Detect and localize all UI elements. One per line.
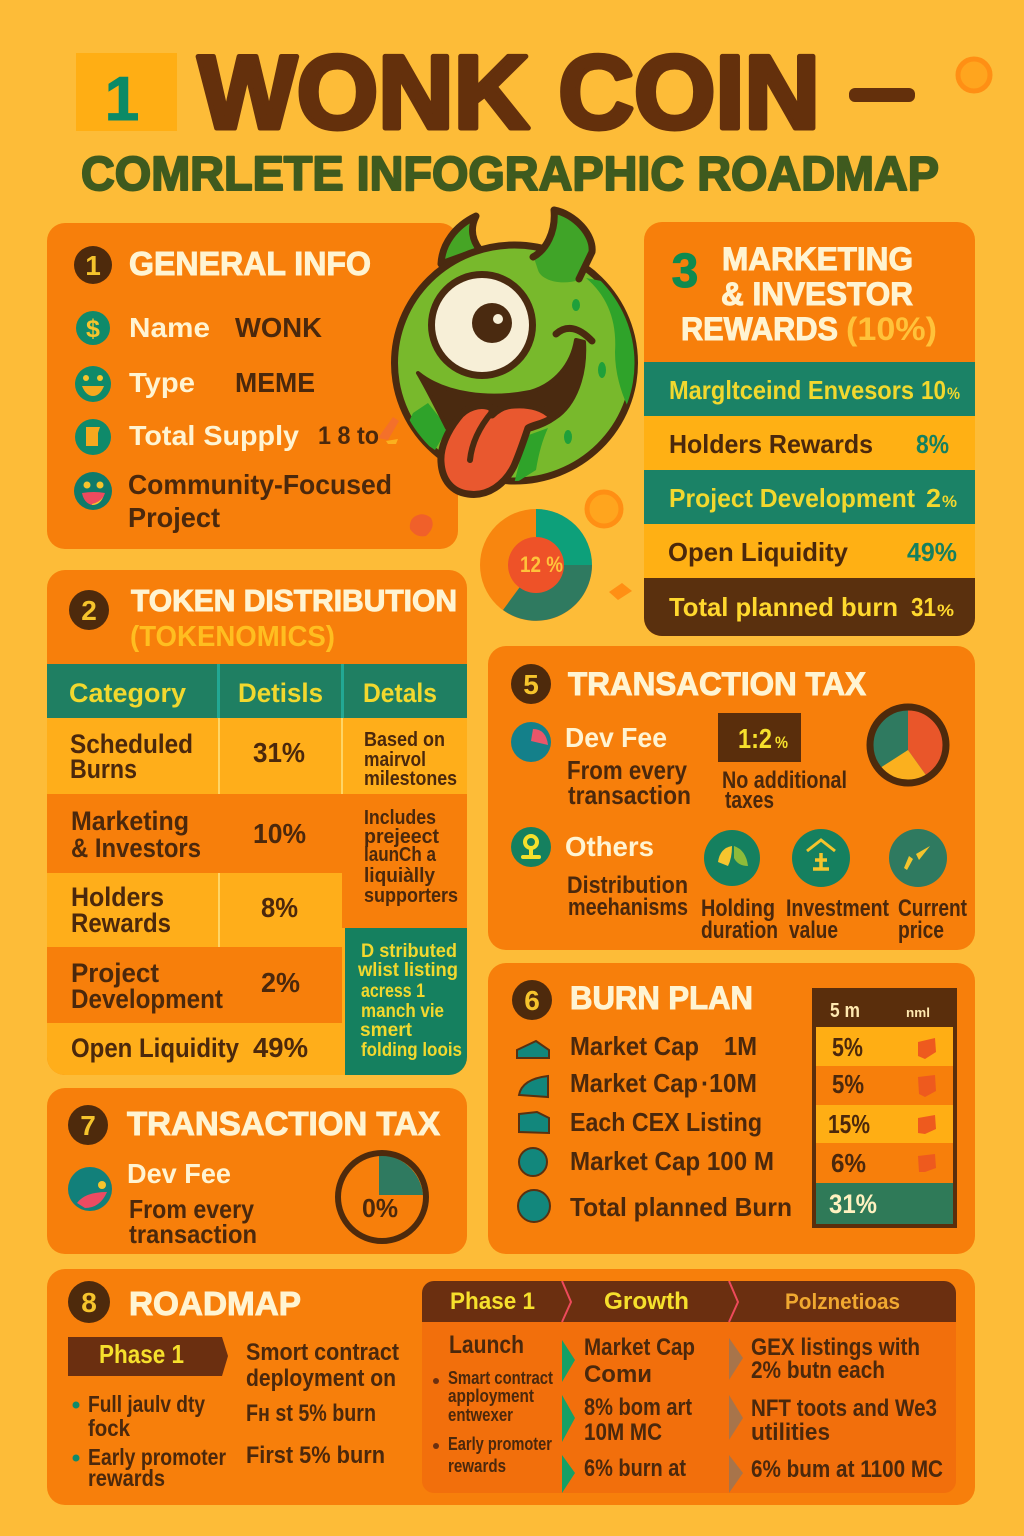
phase 1 bullets: Full jaulv dty [88, 1391, 205, 1417]
row: project development: Project [71, 958, 159, 988]
heading: token distribution: TOKEN DISTRIBUTION [131, 583, 457, 618]
table header [70, 682, 436, 708]
green note: distribution [357, 941, 462, 1061]
row: scheduled burns: mairvol [364, 749, 426, 771]
others text [565, 831, 688, 921]
row: name: WONK [235, 312, 322, 343]
dev fee text [565, 722, 691, 810]
row 5%: 5% [832, 1069, 864, 1099]
title block [76, 35, 990, 201]
milestone: market cap 100M: Market Cap 100 M [570, 1146, 774, 1176]
title dash [849, 88, 915, 102]
dev fee text: From every [129, 1194, 254, 1224]
number 3: 3 [672, 245, 698, 298]
row: type [75, 366, 315, 402]
row: scheduled burns [70, 731, 456, 785]
dev fee text: transaction [568, 780, 691, 810]
decorative blob [410, 514, 433, 536]
current price [889, 829, 967, 944]
tax value box: % [775, 733, 788, 752]
green note: distribution: acress 1 [361, 981, 425, 1002]
pie chart: 0% [338, 1153, 426, 1241]
dev fee text: From every [567, 755, 687, 785]
heading: marketing and investor rewards: & INVESTOR [721, 276, 913, 312]
roadmap timeline [422, 1281, 956, 1493]
number badge 2: 2 [81, 595, 97, 626]
green note: distribution: folding loois [361, 1040, 462, 1061]
milestone: market cap 1M: Market Cap [570, 1031, 699, 1061]
row: marketing and investors: 10% [253, 818, 306, 849]
row: scheduled burns: Scheduled [70, 729, 193, 759]
no additional taxes note: taxes [725, 787, 774, 814]
others text: Distribution [567, 872, 688, 899]
number badge 8 [68, 1281, 110, 1323]
pie chart: tax split [870, 707, 947, 783]
row 15% [816, 1105, 953, 1143]
row: project development: 2% [261, 967, 300, 998]
panel 3: marketing and investor rewards [644, 222, 975, 636]
milestone: market cap 1M [517, 1031, 757, 1061]
row: holders rewards: Rewards [71, 908, 171, 938]
row 5%: 5% [832, 1032, 863, 1062]
row: holders rewards [72, 886, 298, 932]
green note: distribution: wlist listing [357, 960, 458, 981]
row: open liquidity 49%: Open Liquidity [668, 537, 849, 567]
burn milestones list [517, 1031, 792, 1222]
badge: number 1 [76, 53, 177, 134]
phase 1 details: Smort contract [246, 1339, 399, 1366]
phase 1 bullets [72, 1391, 226, 1491]
row: scheduled burns: 31% [253, 737, 305, 768]
column: launch: Early promoter [448, 1434, 552, 1454]
table header: Detisls [238, 678, 323, 708]
dev fee text: transaction [129, 1219, 257, 1249]
dev fee text: Dev Fee [127, 1158, 231, 1189]
green note: distribution: smert [360, 1020, 413, 1041]
row: marketing and investors 10%: 10 [921, 375, 946, 405]
column: growth: Market Cap [584, 1334, 695, 1361]
panel 2: token distribution [47, 570, 467, 1075]
number badge 5: 5 [523, 669, 539, 700]
row: total planned burn 31%: Total planned burn [669, 592, 898, 622]
column: listings and utilities: 2% butn each [751, 1357, 885, 1384]
phase 1 banner: Phase 1 [99, 1339, 184, 1369]
row: total planned burn 31% [644, 578, 975, 636]
row: holders rewards: 8% [261, 892, 298, 923]
row: marketing and investors: Marketing [71, 806, 189, 836]
column: launch: Launch [449, 1331, 524, 1359]
number badge 2 [69, 590, 109, 630]
green note: distribution: manch vie [361, 1001, 444, 1022]
no additional taxes note: No additional [722, 767, 847, 794]
column: launch: Smart contract [448, 1368, 553, 1388]
row 5% [816, 1066, 953, 1105]
milestone: market cap 1M: 1M [724, 1031, 757, 1061]
column: listings and utilities: GEX listings with [751, 1334, 920, 1361]
row: marketing and investors 10% [644, 362, 975, 416]
row: open liquidity [72, 1038, 308, 1062]
column: launch: rewards [448, 1456, 506, 1476]
number badge 1: 1 [85, 250, 101, 281]
investment value: Investment [786, 895, 889, 922]
row: name: Name [129, 312, 210, 343]
small pie chart: 12% [480, 509, 592, 621]
row: type: MEME [235, 367, 315, 398]
phase 1 details: Fн st 5% burn [246, 1400, 376, 1427]
timeline headers: Growth [604, 1288, 689, 1315]
heading: transaction tax: TRANSACTION TAX [568, 666, 867, 702]
number badge 5 [511, 664, 551, 704]
dev fee text: Dev Fee [565, 722, 667, 753]
column arrows: green [562, 1340, 575, 1493]
eye [428, 271, 536, 379]
number badge 6 [512, 980, 552, 1020]
panel 7: transaction tax [47, 1088, 467, 1254]
phase 1 details: deployment on [246, 1365, 396, 1392]
mouth [418, 340, 584, 435]
row: marketing and investors: launCh a [364, 844, 437, 866]
heading: marketing and investor rewards: MARKETING [722, 241, 913, 277]
row: marketing and investors: liquiàlly [364, 865, 436, 887]
phase 1 details [246, 1339, 399, 1469]
row: open liquidity: 49% [253, 1032, 308, 1063]
row: scheduled burns: milestones [364, 768, 457, 790]
column arrows: brown [729, 1338, 743, 1493]
milestone: market cap 10M: ·10M [701, 1068, 757, 1098]
tokenomics table [47, 664, 467, 1075]
phase 1 details: First 5% burn [246, 1442, 385, 1469]
column: launch: entwexer [448, 1405, 513, 1425]
right horn [534, 210, 592, 282]
column: listings and utilities: utilities [751, 1419, 830, 1446]
number badge 1 [74, 246, 112, 284]
dev fee icon [68, 1167, 112, 1211]
heading: burn plan: BURN PLAN [570, 980, 753, 1016]
decorative coin [587, 492, 621, 526]
dev fee text [127, 1158, 257, 1249]
row: type: Type [129, 367, 195, 398]
phase 1 bullets: rewards [88, 1465, 165, 1491]
badge: number 1: 1 [105, 65, 139, 134]
column: listings and utilities: 6% bum at 1100 MC [751, 1456, 943, 1483]
row: project development 2%: % [942, 492, 957, 511]
body [394, 245, 634, 481]
title: WONK COIN: WONK COIN [198, 35, 820, 151]
body shading [405, 278, 645, 484]
row: name: $ [86, 315, 100, 343]
row: total planned burn 31%: 31 [911, 592, 936, 622]
row: marketing and investors: Includes [364, 807, 436, 829]
others text: Others [565, 831, 654, 862]
column: growth: 6% burn at [584, 1455, 686, 1482]
heading: marketing and investor rewards [681, 241, 937, 347]
heading: token distribution [130, 583, 457, 653]
subtitle: COMRLETE INFOGRAPHIC ROADMAP [81, 148, 939, 201]
heading: transaction tax: TRANSACTION TAX [127, 1105, 440, 1142]
row: total planned burn 31%: % [937, 601, 954, 620]
row 5% [816, 1027, 953, 1066]
table header: Detals [363, 678, 437, 708]
dev fee icon [511, 722, 551, 762]
row: community-focused project: Community-Focused [128, 469, 392, 500]
pie chart: 0%: 0% [362, 1193, 398, 1223]
row: total supply: Total Supply [129, 420, 299, 451]
holding duration: Holding [701, 895, 775, 922]
small pie chart: 12%: 12 % [520, 552, 563, 577]
row: marketing and investors: & Investors [71, 833, 201, 863]
row: open liquidity 49%: 49% [907, 537, 957, 567]
row: project development: Development [71, 984, 223, 1014]
row: marketing and investors 10%: Margltceind Envesors [669, 375, 914, 405]
row: marketing and investors 10%: % [947, 384, 960, 403]
burn percentage table: nml [906, 1005, 930, 1020]
milestone: market cap 10M: Market Cap [570, 1068, 698, 1098]
row: marketing and investors: prejeect [364, 826, 439, 848]
left horn [441, 216, 480, 264]
column: growth: 10M MC [584, 1419, 662, 1446]
phase 1 banner [68, 1337, 228, 1376]
decorative diamond [609, 583, 632, 600]
row: holders rewards 8%: Holders Rewards [669, 429, 873, 459]
row 15%: 15% [828, 1109, 870, 1139]
row: project development [71, 958, 300, 1014]
cheek line [556, 328, 592, 341]
others text: meehanisms [568, 894, 688, 921]
investment value [786, 829, 889, 944]
holding duration: duration [701, 917, 778, 944]
column: listings and utilities [751, 1334, 943, 1483]
holding duration [701, 830, 778, 944]
tax value box: 1:2 [738, 723, 772, 754]
row: name [76, 311, 322, 345]
timeline headers: Polznetioas [785, 1289, 900, 1314]
number badge 6: 6 [524, 985, 540, 1016]
burn percentage table: 5 m [830, 1000, 860, 1022]
row: holders rewards: Holders [71, 882, 164, 912]
decorative coin [958, 59, 990, 91]
row total 31%: 31% [829, 1189, 877, 1219]
heading: marketing and investor rewards: REWARDS [681, 311, 838, 347]
row: open liquidity 49% [644, 524, 975, 578]
number badge 7 [68, 1105, 108, 1145]
column: growth [584, 1334, 695, 1482]
decorative splash [378, 417, 399, 444]
column: growth: 8% bom art [584, 1394, 692, 1421]
heading: token distribution: (TOKENOMICS) [130, 621, 335, 653]
row: community-focused project: Project [128, 502, 220, 533]
column: listings and utilities: NFT toots and We3 [751, 1395, 937, 1422]
no additional taxes note [722, 767, 847, 814]
panel 6: burn plan [488, 963, 975, 1254]
row: total supply [75, 419, 379, 455]
column: growth: Comи [584, 1361, 652, 1388]
row: project development 2%: Project Development [669, 483, 915, 513]
panel 1: general info [47, 223, 458, 549]
number badge 7: 7 [80, 1110, 96, 1141]
row: marketing and investors [71, 806, 458, 907]
tax value box [718, 713, 801, 762]
row: scheduled burns: Burns [70, 754, 137, 784]
tongue [441, 405, 552, 494]
investment value: value [789, 917, 838, 944]
panel 5: transaction tax [488, 646, 975, 950]
others icon [511, 827, 551, 867]
row: holders rewards 8% [644, 416, 975, 470]
row: total supply: 1 8 to [318, 422, 379, 450]
phase 1 bullets: Early promoter [88, 1444, 226, 1470]
green note: distribution: D stributed [361, 941, 457, 962]
table header: Category [69, 678, 186, 708]
heading: general info: GENERAL INFO [129, 245, 371, 282]
heading: roadmap: ROADMAP [129, 1285, 301, 1322]
row: open liquidity: Open Liquidity [71, 1033, 239, 1063]
timeline headers [452, 1292, 900, 1309]
mascot: green one-eyed monster [394, 210, 645, 494]
row: marketing and investors: supporters [364, 885, 458, 907]
current price: Current [898, 895, 967, 922]
row total 31% [816, 1183, 953, 1224]
timeline headers: Phase 1 [450, 1288, 535, 1315]
heading: marketing and investor rewards: (10%) [846, 311, 937, 347]
column: launch: apployment [448, 1386, 534, 1406]
row: project development 2% [644, 470, 975, 524]
milestone: each CEX listing: Each CEX Listing [570, 1107, 762, 1137]
column: launch [433, 1331, 553, 1476]
row: scheduled burns: Based on [364, 729, 445, 751]
row: community-focused project [74, 469, 392, 533]
current price: price [898, 917, 944, 944]
skin spots [564, 299, 606, 444]
row: project development 2%: 2 [926, 483, 941, 513]
milestone: market cap 10M [519, 1068, 757, 1098]
phase 1 bullets: fock [88, 1415, 130, 1441]
number badge 8: 8 [81, 1287, 97, 1318]
milestone: total planned burn: Total planned Burn [570, 1192, 792, 1222]
row 6% [816, 1143, 953, 1183]
burn percentage table [812, 988, 957, 1228]
panel 8: roadmap [47, 1269, 975, 1505]
row: holders rewards 8%: 8% [916, 429, 949, 459]
rewards rows [644, 362, 975, 636]
row 6%: 6% [831, 1148, 866, 1178]
